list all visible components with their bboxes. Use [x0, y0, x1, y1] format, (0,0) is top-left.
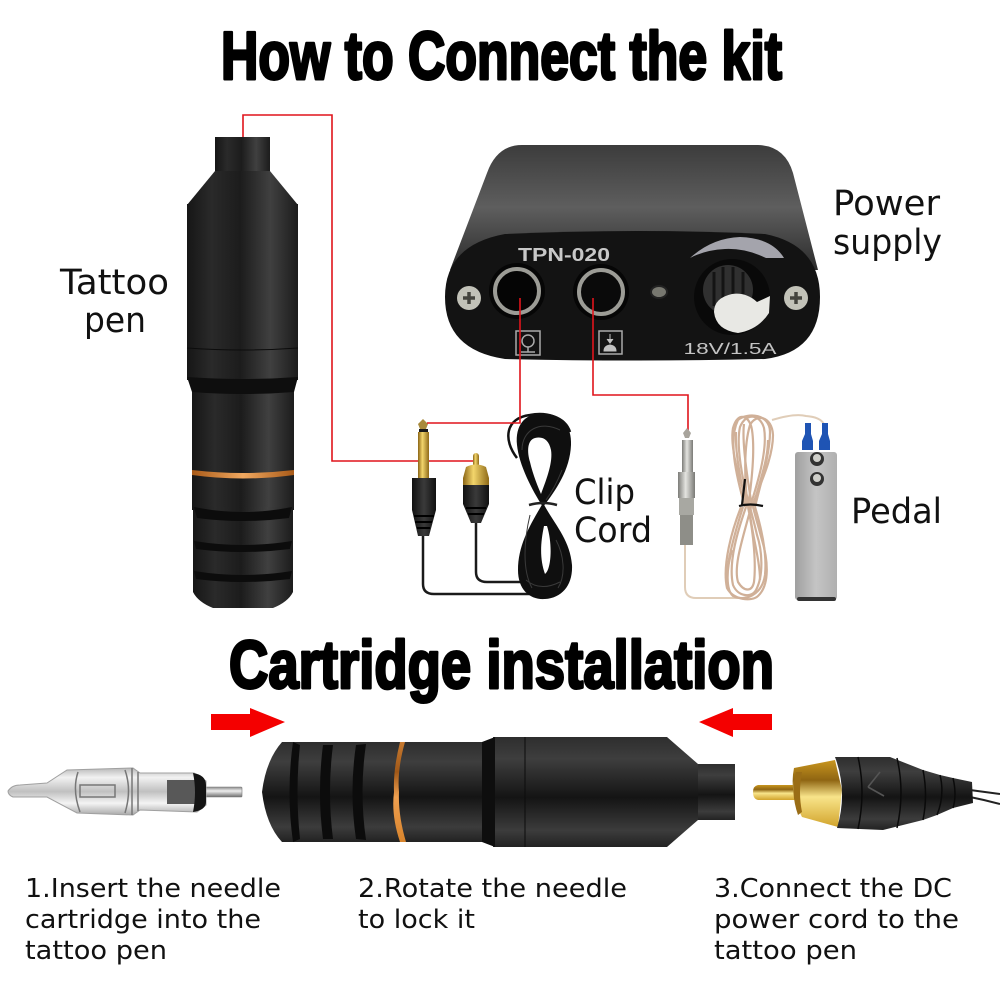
clip cord: [412, 414, 572, 599]
RCA black boot: [835, 757, 973, 830]
pedal jack plug: [678, 428, 695, 545]
horizontal pen body: [493, 737, 667, 847]
power supply top case: [450, 145, 818, 270]
voltage dial arc: [690, 237, 784, 258]
pedal port icon: [599, 331, 622, 354]
model text: TPN-020: [518, 245, 610, 265]
label: power supply: supply: [833, 223, 942, 263]
pedal blue connectors: [802, 423, 830, 450]
connection line: jack to pen socket: [427, 298, 520, 423]
cartridge steel pin: [205, 787, 242, 797]
RCA plug: [463, 453, 489, 523]
step 3 text: power cord to the: [714, 905, 959, 935]
arrow: left, pointing right: [211, 708, 285, 737]
pen port icon: [516, 331, 540, 355]
label: pedal: Pedal: [851, 492, 942, 532]
cartridge inner details: [75, 768, 138, 815]
pedal cable: [685, 415, 824, 598]
mono jack plug: [412, 419, 436, 536]
RCA gold collar: [793, 760, 842, 827]
step 1 text: 1.Insert the needle: [25, 874, 281, 904]
title: How to Connect the kit: [221, 18, 782, 94]
tattoo pen, horizontal: [262, 737, 735, 847]
socket: pen output: [489, 263, 545, 319]
pen orange ring: [192, 470, 294, 478]
label: clip cord: Clip: [574, 473, 635, 513]
rating text: 18V/1.5A: [684, 341, 777, 358]
connection line: pedal jack to pedal socket: [593, 298, 688, 431]
socket: pedal input: [573, 264, 629, 320]
power supply: [445, 145, 820, 360]
horizontal pen cap: [695, 764, 735, 820]
label: clip cord: Cord: [574, 511, 652, 551]
pedal plate: [795, 452, 837, 601]
label: clip cord: [574, 473, 652, 551]
horizontal pen grip: [365, 742, 482, 842]
clip cord coil: [508, 414, 572, 599]
tattoo pen: [187, 137, 298, 608]
label: tattoo pen: [59, 263, 169, 341]
cartridge thread: [167, 780, 195, 804]
pen dark ring: [187, 377, 298, 394]
step 3 text: tattoo pen: [714, 936, 857, 966]
cartridge transparent body: [8, 768, 206, 815]
horizontal pen shoulder: [665, 737, 698, 847]
label: tattoo pen: pen: [84, 301, 146, 341]
cable tie: [739, 479, 763, 506]
connection line: tattoo pen to RCA plug: [243, 115, 476, 461]
cartridge black collar: [193, 773, 206, 812]
label: power supply: [833, 184, 942, 263]
label: power supply: Power: [833, 184, 941, 224]
indicator LED: [651, 286, 667, 298]
step 2 text: [358, 874, 627, 935]
pen lower grip: [192, 388, 294, 510]
step 1 text: tattoo pen: [25, 936, 167, 966]
pen shoulder: [187, 171, 298, 206]
section heading: Cartridge installation: [229, 627, 774, 703]
horizontal pen ribbed tip: [262, 742, 366, 842]
pedal cable coil: [726, 416, 773, 599]
label: tattoo pen: Tattoo: [59, 263, 169, 303]
pen cap: [215, 137, 270, 173]
horizontal pen orange ring: [393, 742, 406, 842]
voltage knob: [694, 259, 770, 335]
horizontal pen dark ring: [480, 737, 495, 847]
step 1 text: [25, 874, 281, 966]
clip cord cables: [423, 520, 530, 594]
step 3 text: 3.Connect the DC: [714, 874, 952, 904]
needle cartridge: [8, 768, 242, 815]
step 1 text: cartridge into the: [25, 905, 261, 935]
pen body: [187, 204, 298, 380]
power supply front plate: [445, 231, 820, 360]
RCA metal pin: [753, 785, 795, 800]
arrow: right, pointing left: [699, 708, 772, 737]
pedal assembly: [678, 415, 837, 601]
step 2 text: 2.Rotate the needle: [358, 874, 627, 904]
right screw: [784, 286, 808, 310]
RCA power cord: [753, 757, 1000, 830]
power cord wires: [970, 790, 1000, 804]
left screw: [457, 286, 481, 310]
step 3 text: [714, 874, 959, 966]
pen ribbed tip: [193, 507, 293, 608]
step 2 text: to lock it: [358, 905, 475, 935]
